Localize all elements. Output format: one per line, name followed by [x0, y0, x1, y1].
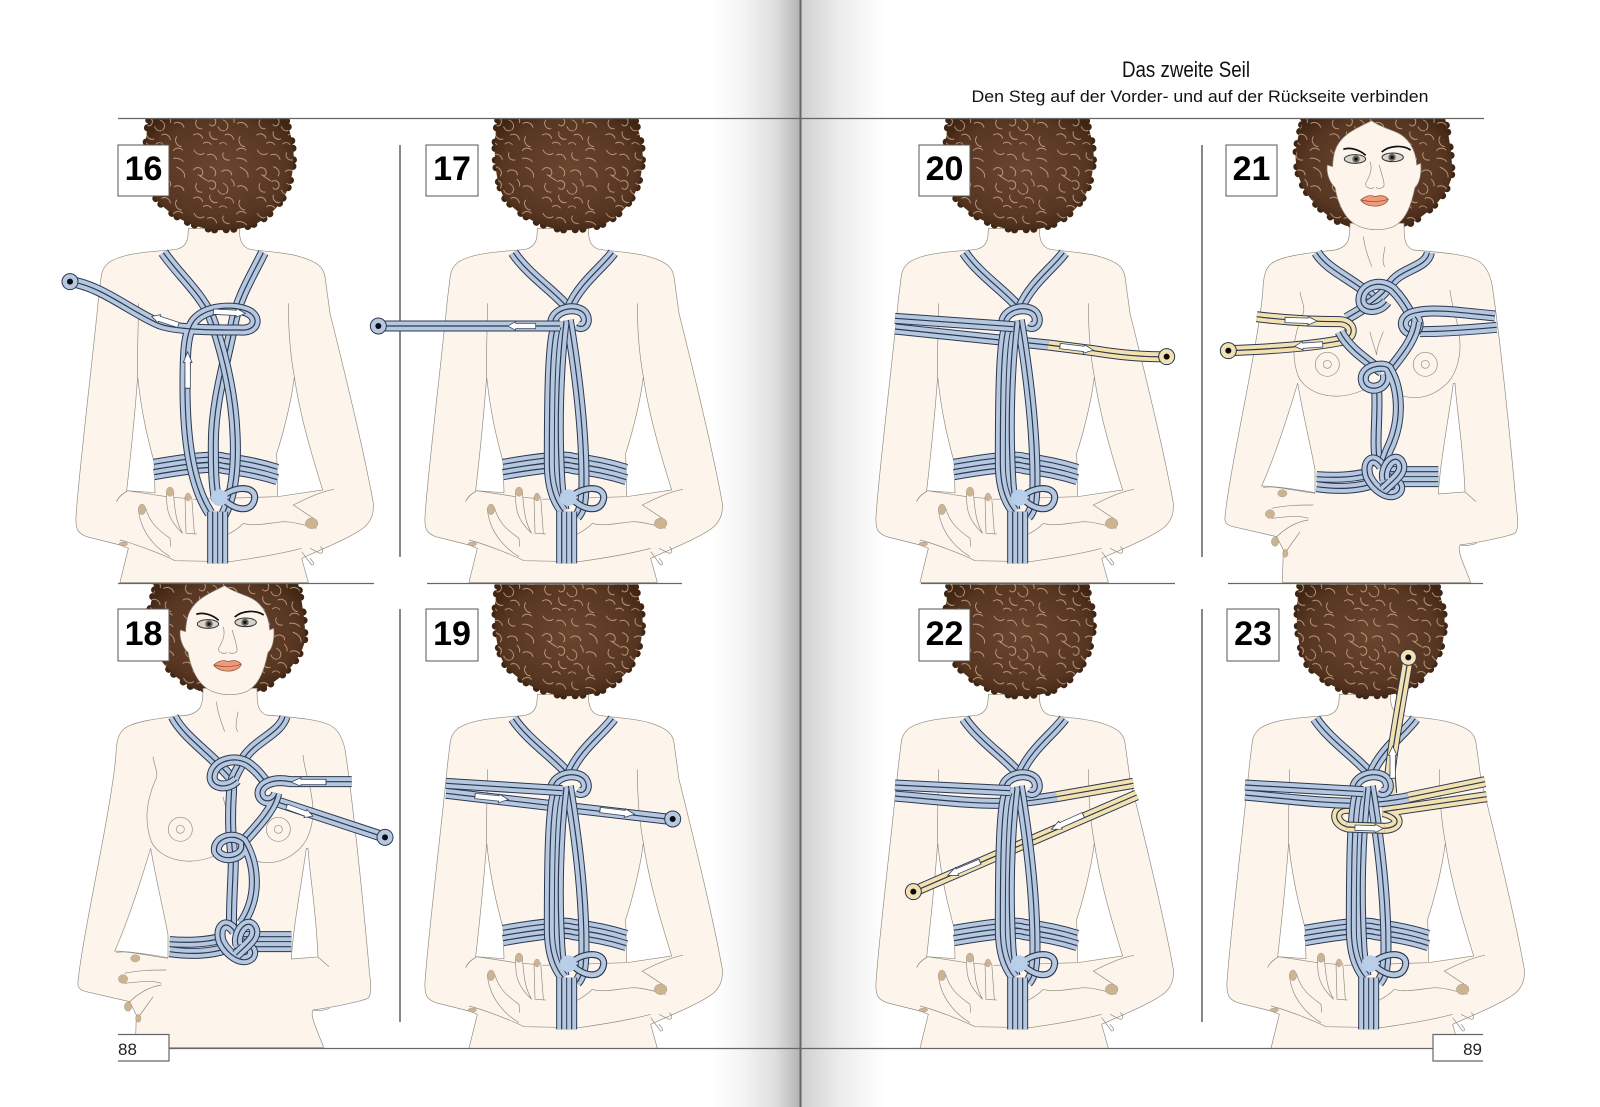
panel: step 23	[1227, 584, 1524, 1048]
panel: step 19	[425, 584, 722, 1048]
panel: step 18	[78, 583, 393, 1047]
front figure, step 21	[1220, 118, 1518, 582]
ropes, step 18	[170, 717, 393, 960]
number box 20	[919, 145, 970, 196]
heading: chapter title and subtitle	[972, 57, 1428, 106]
number box 22	[919, 609, 970, 661]
vertical panel dividers	[400, 145, 1202, 1022]
page number 88: 88	[118, 1040, 137, 1059]
number box 17	[426, 145, 478, 196]
panel: step 21	[1220, 118, 1518, 582]
page number 89: 89	[1463, 1040, 1482, 1059]
page number 88	[118, 1034, 169, 1061]
number box 16: 16	[125, 150, 162, 188]
number box 20: 20	[926, 150, 963, 188]
number box 19	[426, 609, 478, 661]
number box 21: 21	[1233, 150, 1270, 188]
horizontal rules	[118, 118, 1484, 1048]
figure with rope, step 20	[876, 118, 1175, 582]
figure with rope, step 19	[425, 584, 722, 1048]
panel: step 17	[370, 118, 722, 582]
panel: step 16	[62, 118, 373, 582]
figure with rope, step 17	[370, 118, 722, 582]
panel: step 22	[876, 584, 1173, 1048]
page number 89	[1433, 1034, 1483, 1061]
figure with rope, step 22	[876, 584, 1173, 1048]
panel: step 20	[876, 118, 1175, 582]
number box 18: 18	[125, 615, 162, 653]
front figure, step 18	[78, 583, 371, 1047]
number box 23	[1227, 609, 1279, 661]
heading: chapter title and subtitle: Das zweite Seil	[1122, 57, 1250, 82]
number box 17: 17	[433, 150, 471, 188]
number box 22: 22	[926, 615, 963, 653]
figure with rope, step 16	[62, 118, 373, 582]
number box 21	[1226, 145, 1277, 196]
heading: chapter title and subtitle: Den Steg auf der Vorder- und auf der Rückseite verbinden	[972, 87, 1428, 106]
figure with rope, step 23	[1227, 584, 1524, 1048]
number box 19: 19	[433, 615, 471, 653]
number box 18	[118, 609, 169, 661]
number box 23: 23	[1234, 615, 1272, 653]
number box 16	[118, 145, 169, 196]
